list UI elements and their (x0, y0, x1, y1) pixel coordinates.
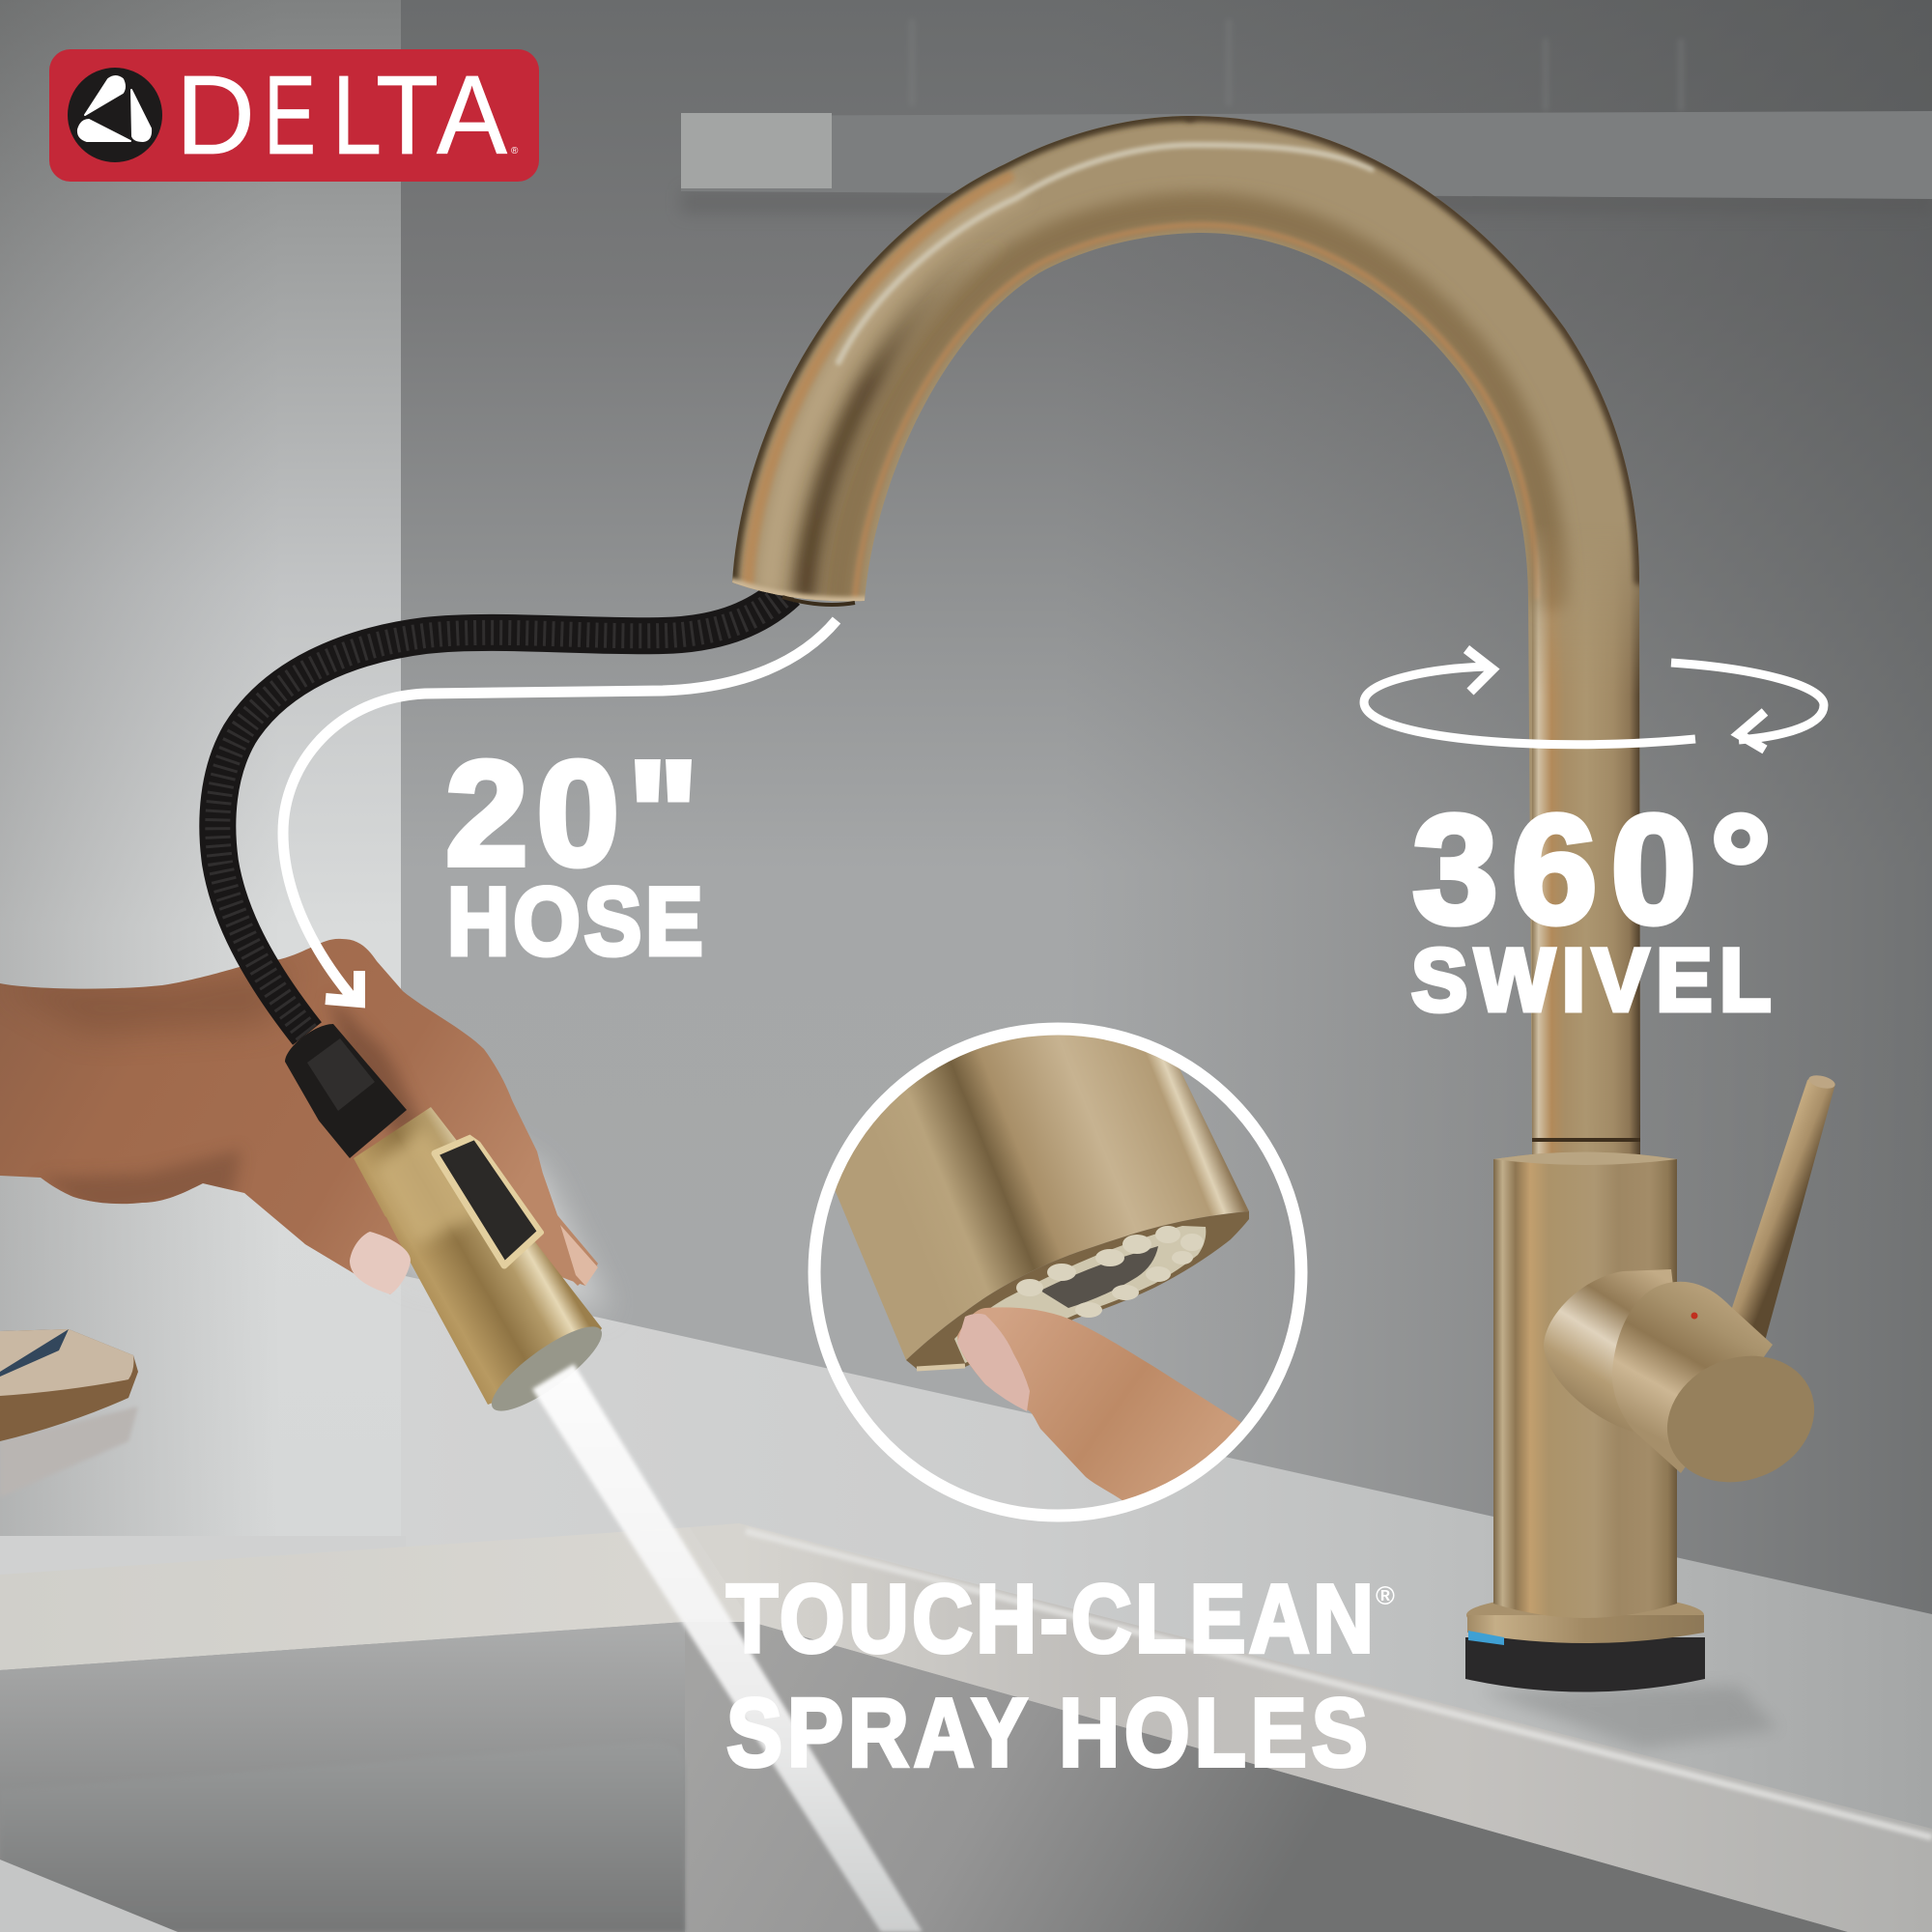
shelf (681, 111, 1932, 214)
arrow: swivel (1364, 649, 1824, 750)
spray face (954, 1226, 1206, 1363)
spray face (481, 1314, 612, 1424)
sprayer body (354, 1107, 612, 1424)
hand (0, 939, 598, 1294)
handle lever (1724, 1073, 1836, 1345)
label: touch-clean spray holes: SPRAY HOLES (726, 1678, 1368, 1786)
background: left light wall panel (0, 0, 401, 1546)
finger nail (957, 1314, 1030, 1411)
sink right rim (690, 1523, 1932, 1932)
handle end face (1648, 1334, 1833, 1504)
logo wordmark: D (176, 52, 255, 178)
spray nozzles (1016, 1226, 1204, 1318)
finger (957, 1307, 1240, 1501)
thumb (261, 1169, 411, 1294)
glassware on shelf (912, 19, 1681, 111)
finger nail (560, 1225, 598, 1286)
handle hub (1544, 1269, 1681, 1432)
cutting board (0, 1329, 138, 1497)
logo wordmark: T (376, 52, 439, 178)
arrow: hose length (283, 620, 837, 1002)
logo wordmark: L (332, 52, 382, 178)
label: 360 swivel: 360° (1412, 782, 1772, 955)
fingers over sprayer (425, 1043, 598, 1286)
label: 360 swivel: SWIVEL (1411, 931, 1771, 1031)
logo wordmark: E (264, 52, 316, 178)
label: 20 inch hose (283, 620, 837, 1002)
callout: touch-clean inset (811, 966, 1301, 1521)
logo: Delta (49, 49, 539, 182)
logo wordmark: ® (511, 146, 519, 156)
sink basin (0, 1622, 1848, 1932)
spray face centre (1040, 1246, 1158, 1308)
logo mark (68, 68, 162, 162)
spray head close-up (835, 1036, 1249, 1372)
base shadow on counter (1478, 1686, 1777, 1748)
spout mouth shadow (782, 597, 855, 605)
sprayer button (435, 1136, 541, 1265)
faucet spout (732, 116, 1640, 1159)
label: touch-clean spray holes (726, 1564, 1395, 1786)
hose (217, 591, 787, 1034)
collar (1532, 1125, 1640, 1164)
spray face rim (906, 1211, 1249, 1369)
faucet base (1465, 1073, 1836, 1692)
base plate (1465, 1595, 1705, 1692)
thumb nail (350, 1232, 411, 1294)
handle cylinder (1612, 1282, 1773, 1473)
hose connector (285, 1024, 407, 1158)
label: touch-clean spray holes: TOUCH-CLEAN (726, 1564, 1374, 1672)
hand holding sprayer (0, 591, 787, 1424)
counter top (0, 1092, 1932, 1932)
logo wordmark (176, 52, 519, 178)
sink front lip (0, 1527, 752, 1670)
label: 20 inch hose: HOSE (447, 868, 703, 975)
label: 20 inch hose: 20" (445, 730, 698, 896)
body cylinder (1493, 1151, 1677, 1618)
label: touch-clean spray holes: ® (1376, 1581, 1395, 1610)
label: 360 swivel (1364, 649, 1824, 1031)
water stream (532, 1364, 923, 1932)
logo wordmark: A (437, 52, 508, 178)
